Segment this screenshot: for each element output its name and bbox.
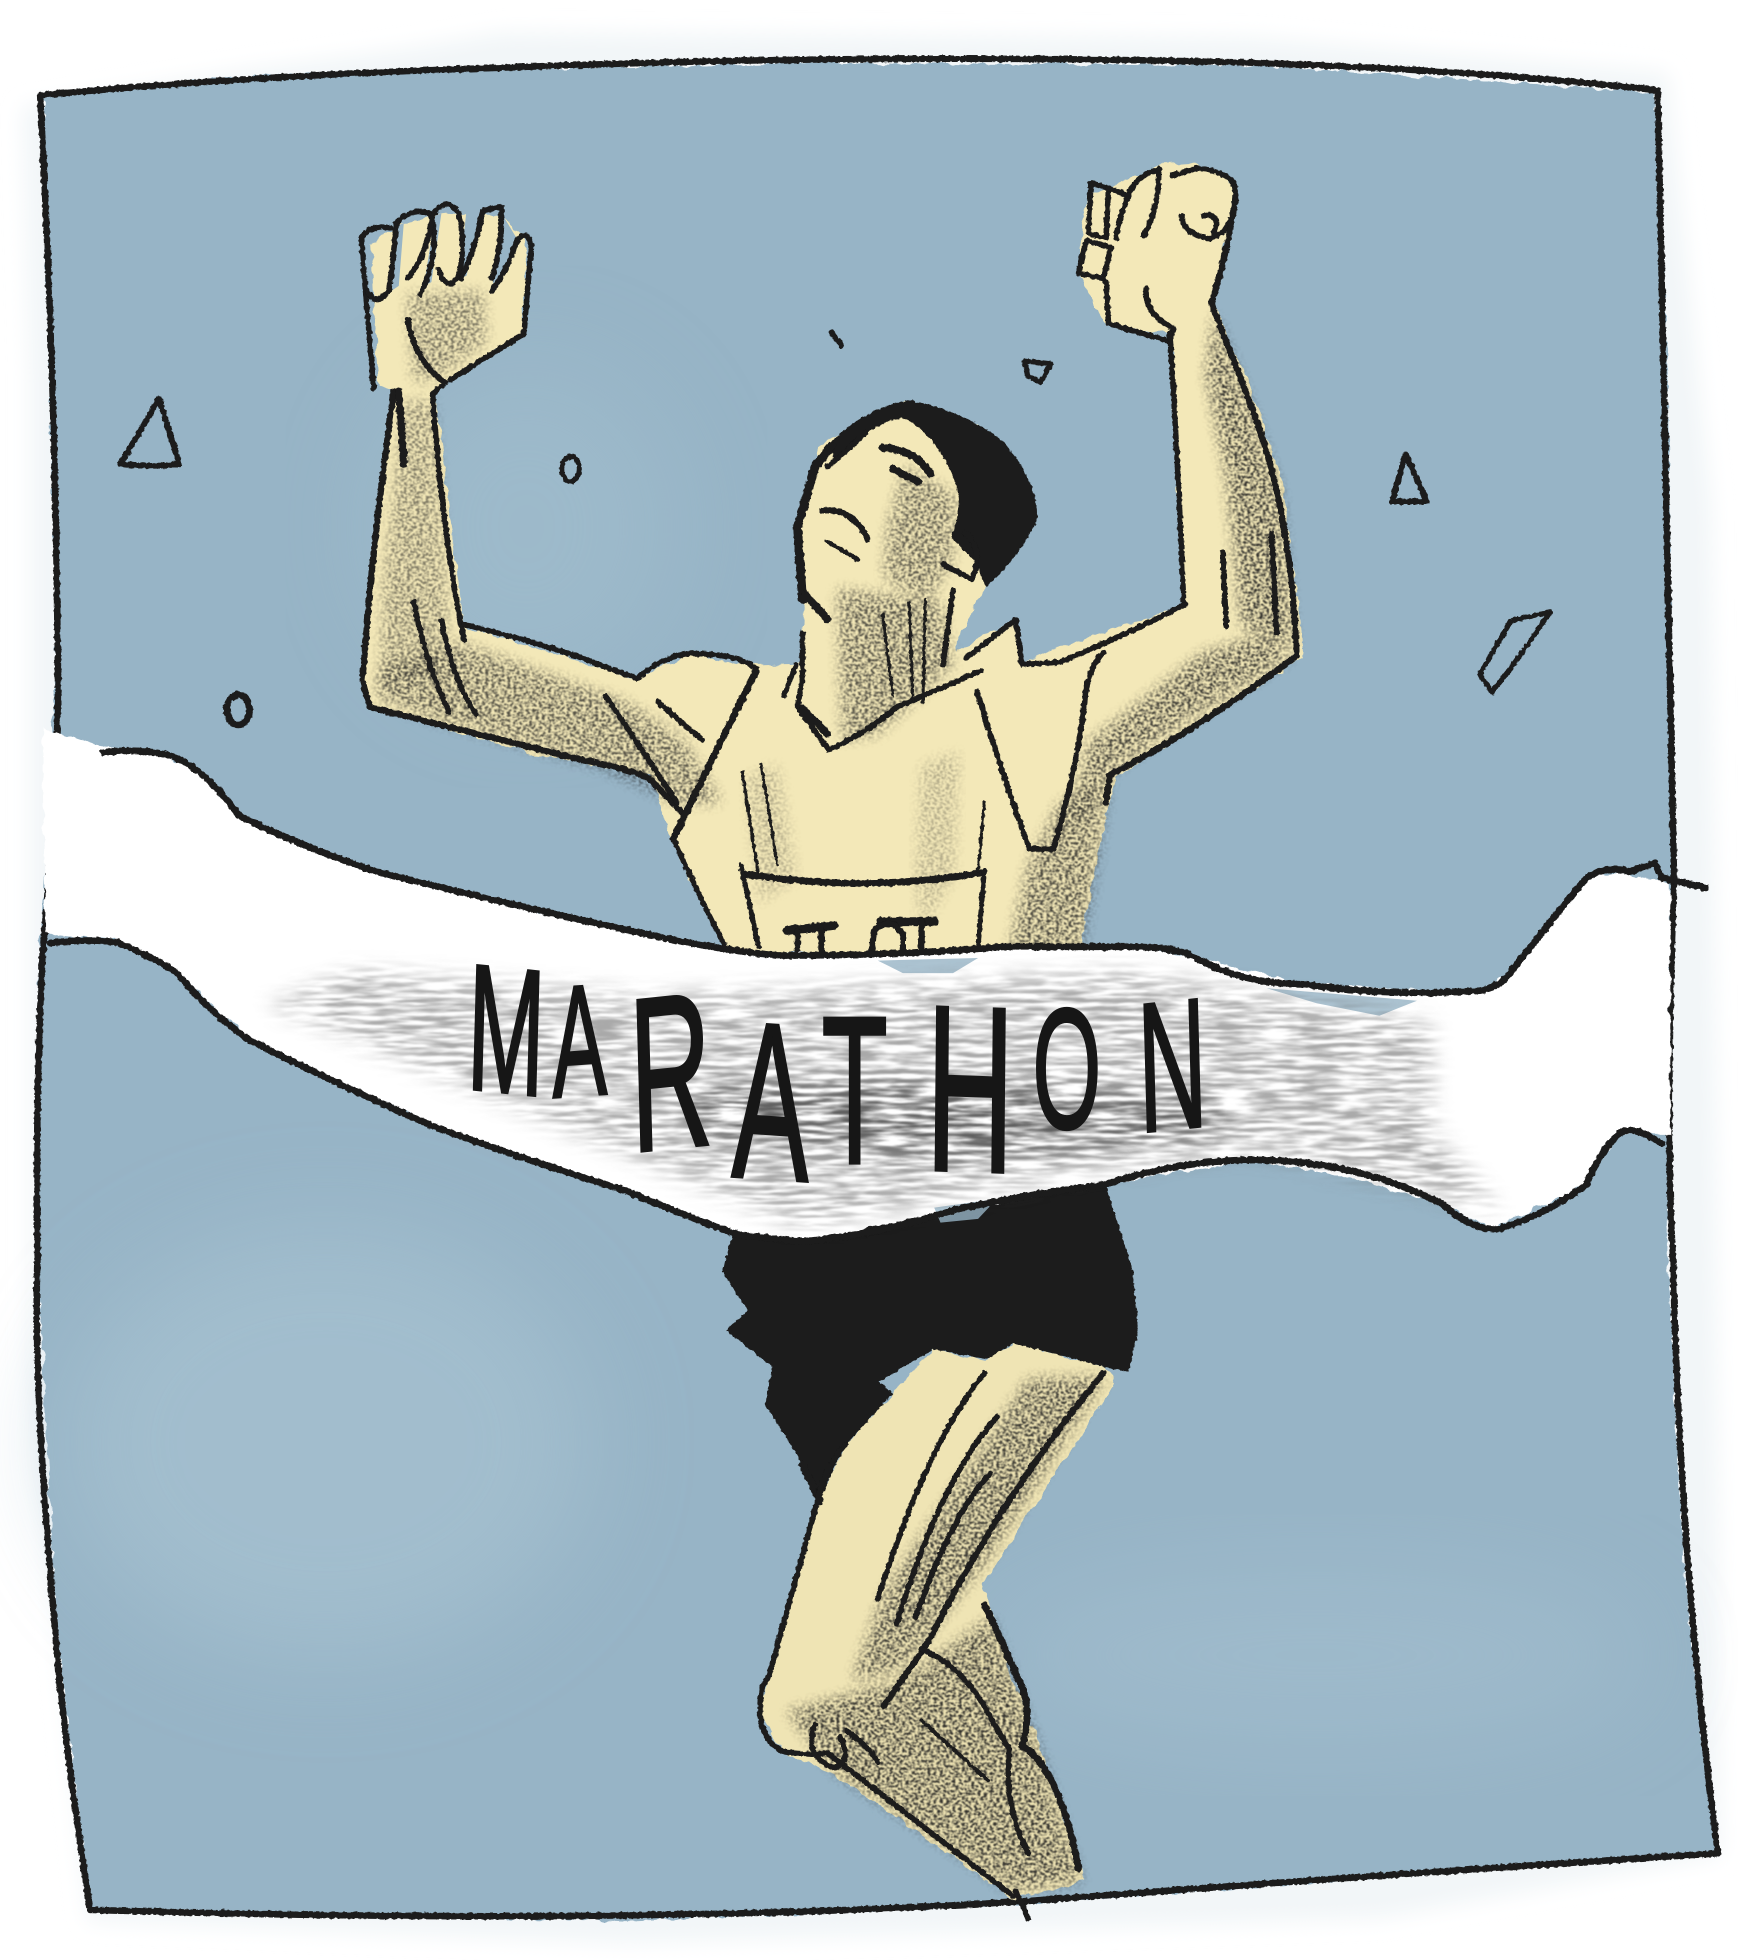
runner: crayon shading: [376, 291, 1294, 1891]
right fist and arm outline: [966, 168, 1297, 849]
confetti: small quad: [1024, 361, 1051, 382]
confetti: dark ring: [227, 695, 250, 725]
finish tape: MARATHON lettering: M: [465, 926, 547, 1135]
confetti: speck: [831, 332, 841, 345]
left hand and arm outline: [361, 204, 756, 813]
vest and race bib: [673, 665, 984, 953]
finish tape: MARATHON lettering: O: [1033, 973, 1101, 1164]
finish tape: MARATHON lettering: H: [925, 955, 1015, 1223]
finish tape: MARATHON lettering: N: [1135, 960, 1209, 1173]
confetti: triangle left: [120, 399, 179, 466]
finish tape: darker band of shading: [683, 1081, 1235, 1160]
runner: [361, 163, 1304, 1919]
leg outline and muscle lines: [760, 1373, 1103, 1919]
runner: blue gaps between the raised fingers: [391, 211, 517, 291]
runner: ink outlines: [361, 168, 1297, 1919]
finish tape: MARATHON lettering: A: [550, 950, 608, 1131]
face details: [798, 433, 981, 750]
finish tape: MARATHON lettering: R: [627, 945, 715, 1199]
finish tape: white ribbon: [43, 727, 1670, 1241]
finish tape: ink edges: [50, 751, 1705, 1241]
finish tape: MARATHON lettering: A: [730, 974, 812, 1229]
confetti: shard: [1480, 612, 1550, 692]
finish tape: grey crayon shading: [270, 972, 1498, 1226]
runner: skin and vest colour: [362, 163, 1304, 953]
runner: shorts: [722, 1181, 1139, 1501]
confetti shapes: [120, 332, 1550, 725]
runner: hair: [831, 400, 1037, 587]
confetti: small ring: [562, 456, 579, 482]
runner: leg: [760, 1343, 1116, 1899]
finish tape: blue shadows under the top edge: [878, 958, 1417, 1223]
finish tape: MARATHON lettering: T: [822, 973, 888, 1208]
finish tape: [43, 727, 1705, 1241]
confetti: triangle right: [1392, 454, 1427, 502]
